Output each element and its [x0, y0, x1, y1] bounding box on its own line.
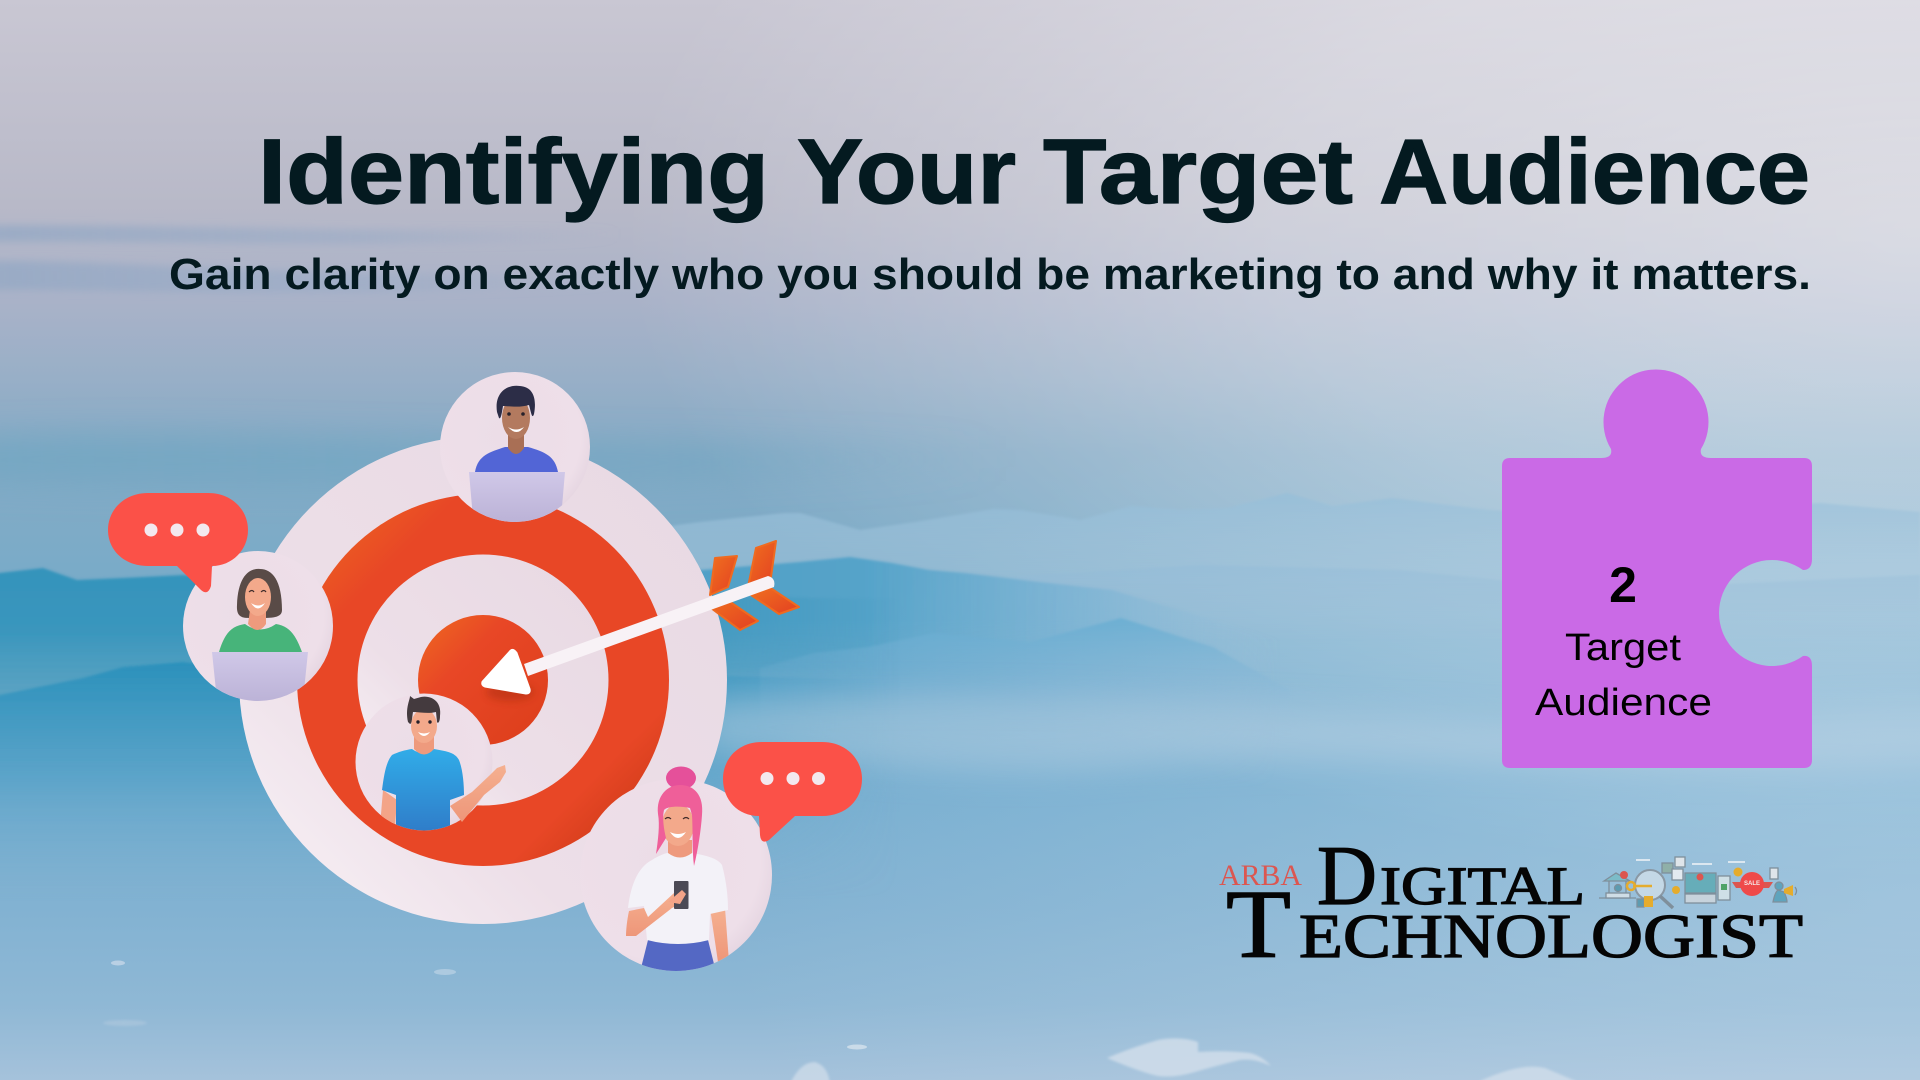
- logo icon: sale label: SALE: [1744, 881, 1760, 887]
- puzzle label: Audience: [1535, 682, 1712, 724]
- target rings: [239, 436, 727, 924]
- clouds: [1107, 1038, 1271, 1076]
- logo text: Technologist: T: [1226, 871, 1291, 978]
- title: Audience: [1379, 121, 1810, 223]
- logo text: Digital: IGITAL: [1380, 856, 1585, 916]
- logo text: Digital: D: [1317, 829, 1377, 923]
- speech bubble: left: [108, 493, 248, 592]
- title: Identifying: [258, 121, 769, 223]
- logo text: Technologist: [1226, 871, 1803, 978]
- subtitle: Gain clarity on exactly who you should be marketing to and why it matters.: [169, 250, 1811, 299]
- person: left woman with laptop: [183, 551, 333, 710]
- illustration: target with people, arrow and speech bubbles: [108, 372, 862, 972]
- speech bubble: right: [723, 742, 862, 842]
- person: top with laptop: [440, 372, 590, 530]
- left mountains: [0, 566, 849, 832]
- title: [258, 121, 1810, 223]
- puzzle label: [1535, 627, 1712, 724]
- logo text: Digital: [1317, 829, 1585, 923]
- logo text: ARBA: ARBA: [1219, 859, 1302, 892]
- puzzle number: 2: [1609, 557, 1637, 613]
- puzzle piece: target audience: [1502, 369, 1812, 768]
- far mountains: [640, 493, 1920, 640]
- logo text: Technologist: ECHNOLOGIST: [1299, 903, 1803, 971]
- title: Your: [797, 121, 1016, 223]
- title: Target: [1043, 121, 1353, 223]
- puzzle label: Target: [1565, 627, 1681, 669]
- arrow: [483, 541, 799, 701]
- logo: ARBA Digital Technologist: [1219, 829, 1803, 978]
- person: woman with phone: [580, 766, 772, 972]
- person: centre man in blue shirt: [356, 694, 506, 840]
- logo icon strip: [1599, 857, 1796, 908]
